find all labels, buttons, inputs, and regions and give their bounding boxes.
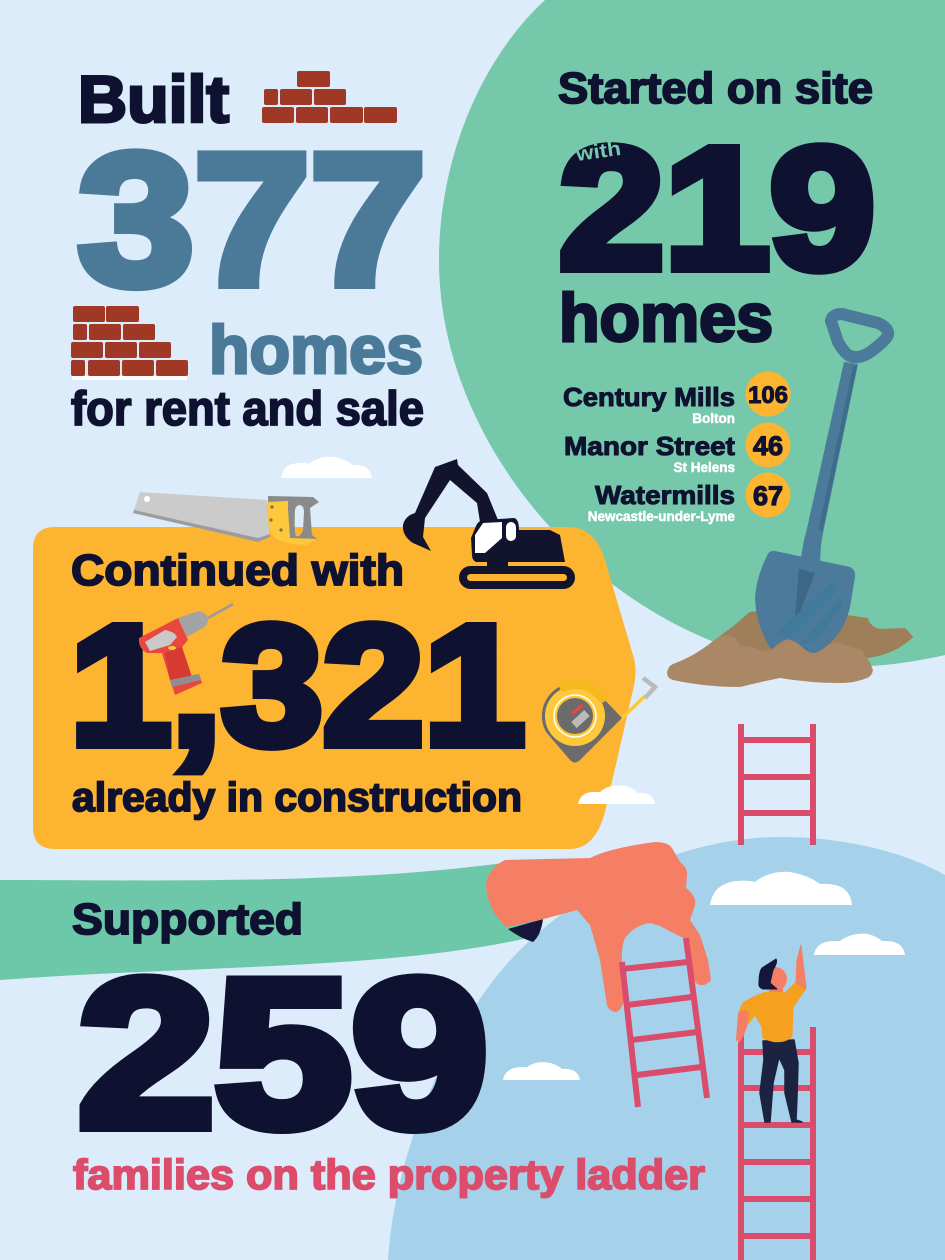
green blob: started on site background (439, 0, 945, 667)
icon: bricks top (262, 71, 397, 123)
number: 1,321: 1,321 (70, 591, 525, 781)
site: manor street: Manor Street (564, 431, 735, 461)
green band (0, 862, 540, 980)
text: already in construction: already in construction (72, 774, 522, 820)
panel: built (71, 62, 426, 436)
heading: started on site: Started on site (558, 64, 873, 113)
text: homes: homes (559, 280, 773, 356)
panel: started on site (558, 64, 875, 524)
site: watermills (588, 472, 790, 524)
icon: shovel in dirt (667, 314, 912, 687)
icon: saw (133, 492, 319, 545)
cloud: near tag (578, 785, 655, 804)
number: 259: 259 (78, 936, 488, 1171)
cloud: small top (281, 457, 372, 478)
heading: continued with: Continued with (71, 546, 404, 595)
ladder: top (738, 724, 816, 845)
panel: continued with (33, 527, 636, 849)
light blue hill (388, 837, 945, 1260)
text: with: with (574, 138, 622, 166)
site: manor street (564, 422, 790, 475)
site: century mills: Century Mills (563, 382, 735, 412)
site: century mills (563, 372, 790, 426)
cloud: large (710, 872, 852, 905)
icon: drill (139, 604, 233, 695)
panel: supported (72, 895, 705, 1198)
site: watermills: Watermills (595, 480, 735, 510)
cloud: medium (814, 934, 905, 955)
site: manor street: 46 (753, 431, 783, 461)
number: 219: 219 (559, 111, 875, 305)
number: 377: 377 (78, 115, 426, 324)
icon: bricks lower (71, 306, 188, 380)
icon: hand (486, 842, 711, 1012)
site: manor street: St Helens (673, 460, 735, 475)
ladder: lower (738, 1027, 816, 1260)
figure: person on ladder (736, 945, 806, 1122)
text: homes: homes (209, 312, 423, 388)
icon: excavator (403, 459, 571, 585)
text: for rent and sale: for rent and sale (71, 383, 424, 436)
heading: supported: Supported (72, 895, 303, 944)
icon: tape measure (542, 678, 655, 762)
orange tag shape (33, 527, 636, 849)
cloud: small lower (503, 1062, 580, 1080)
site: century mills: Bolton (692, 411, 735, 426)
site: watermills: 67 (753, 481, 783, 511)
ladder: tilted, held by hand (622, 938, 707, 1107)
text: families on the property ladder: families on the property ladder (73, 1151, 705, 1198)
site: century mills: 106 (748, 382, 788, 409)
heading: built: Built (78, 62, 229, 136)
site: watermills: Newcastle-under-Lyme (588, 509, 735, 524)
